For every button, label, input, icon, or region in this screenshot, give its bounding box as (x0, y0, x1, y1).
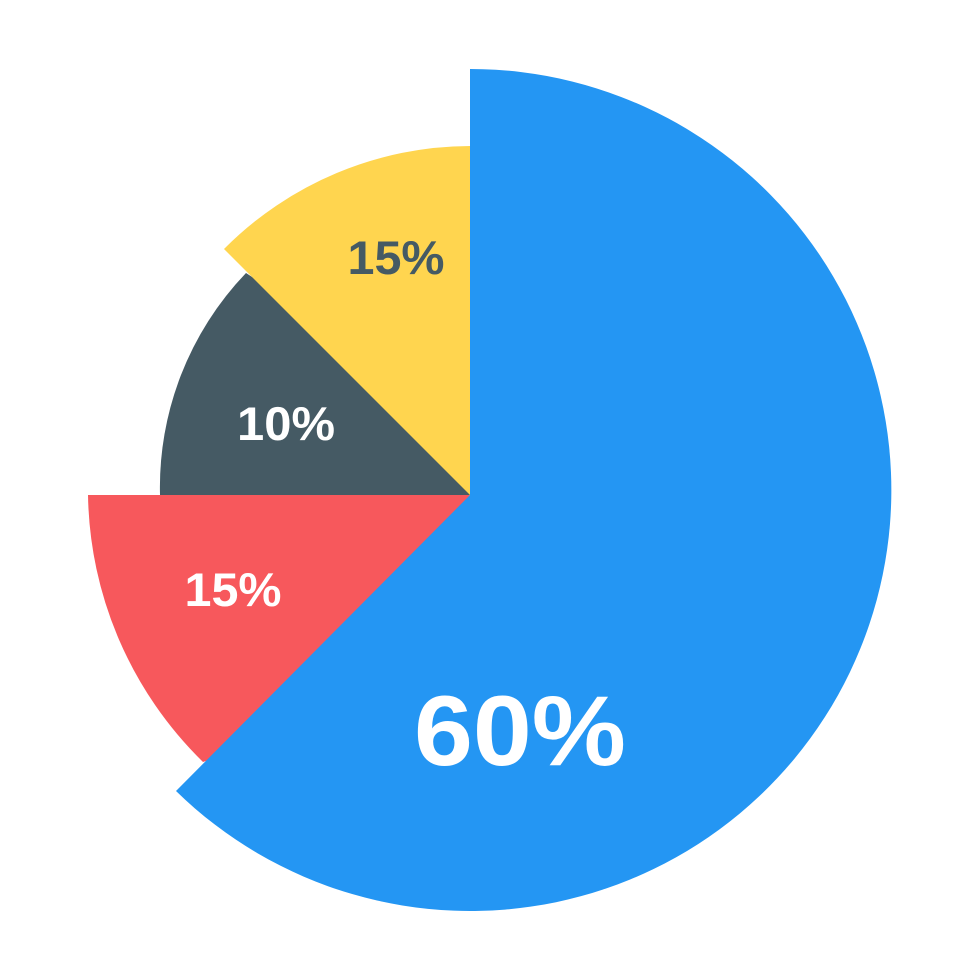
label: yellow 15%: 15% (348, 231, 444, 284)
segment: dark slate 10% (160, 273, 470, 495)
segment: red 15% (88, 495, 470, 762)
segment: blue 60% (176, 69, 891, 911)
label: blue 60%: 60% (414, 675, 626, 786)
segment: yellow 15% (224, 146, 470, 495)
label: red 15%: 15% (184, 563, 282, 616)
label: dark slate 10%: 10% (237, 397, 335, 450)
